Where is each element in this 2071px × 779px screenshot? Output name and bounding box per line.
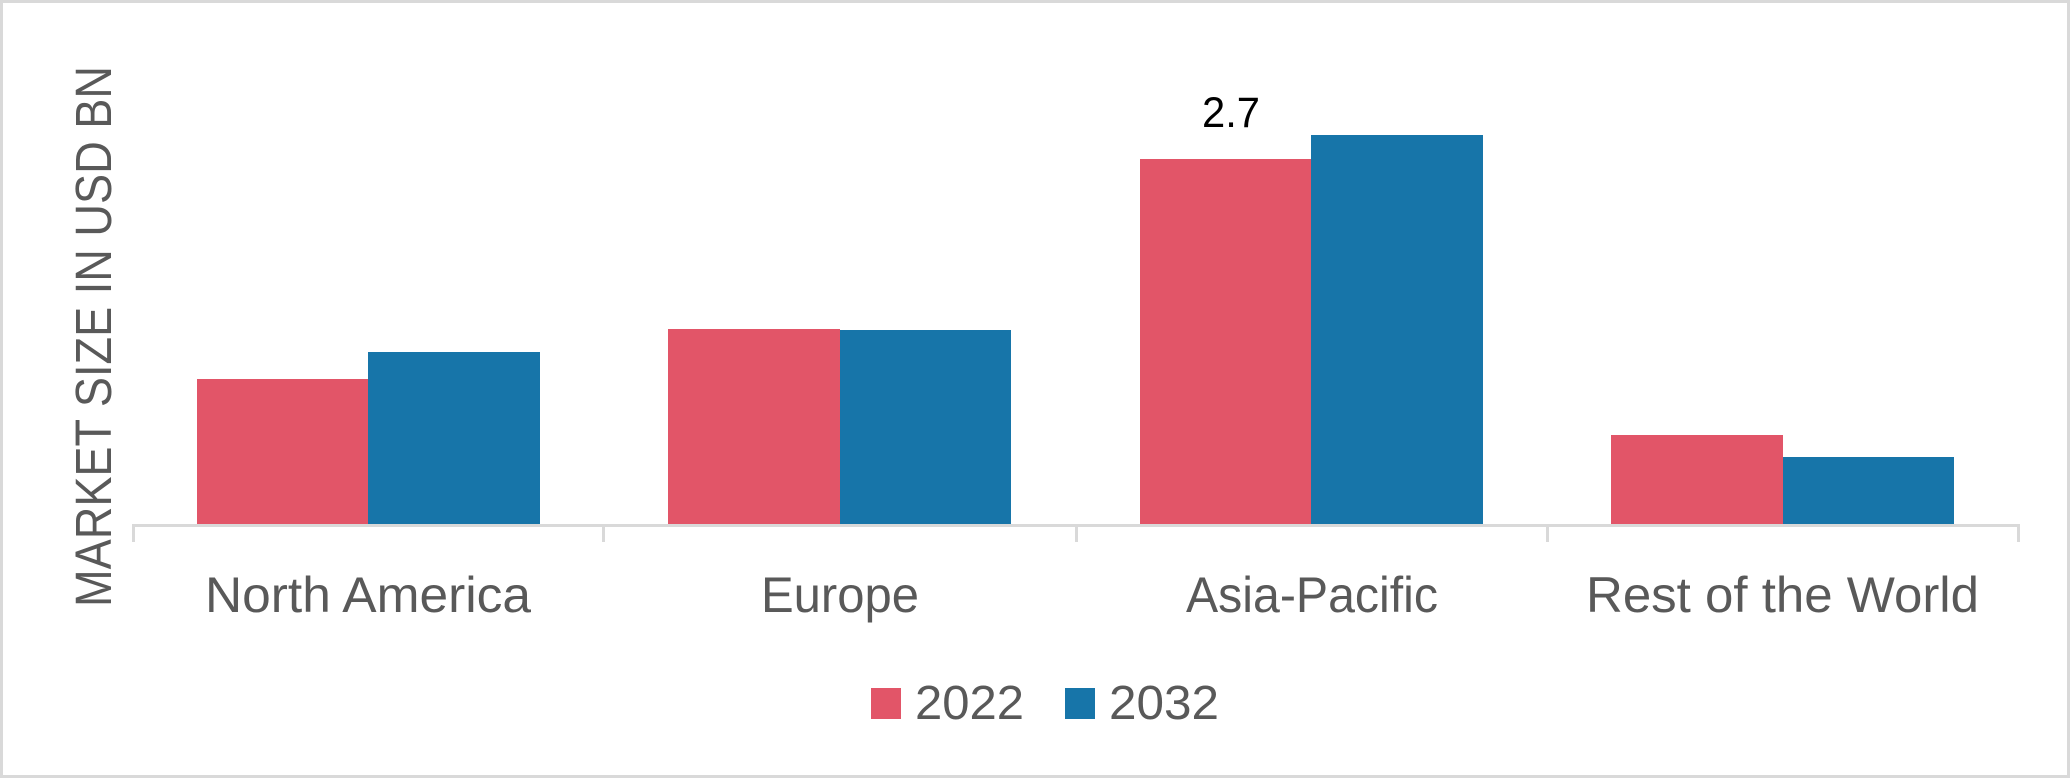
- y axis title: MARKET SIZE IN USD BN: [65, 66, 122, 607]
- x axis: [132, 524, 2020, 542]
- legend item: 2032: 2032: [1109, 677, 1219, 730]
- bars: Europe: [668, 329, 1011, 524]
- bars: North America: [197, 352, 540, 524]
- bars: Asia-Pacific: [1140, 135, 1483, 524]
- legend: [871, 677, 1219, 730]
- category label: Europe: Europe: [761, 567, 919, 623]
- legend item: 2032: [1065, 677, 1219, 730]
- category label: North America: North America: [205, 567, 531, 623]
- category label: Rest of the World: Rest of the World: [1586, 567, 1979, 623]
- bars: Rest of the World: [1611, 435, 1954, 524]
- legend item: 2022: 2022: [915, 677, 1024, 730]
- legend item: 2022: [871, 677, 1024, 730]
- data label: 2.7: 2.7: [1202, 89, 1260, 137]
- category label: Asia-Pacific: Asia-Pacific: [1186, 567, 1438, 623]
